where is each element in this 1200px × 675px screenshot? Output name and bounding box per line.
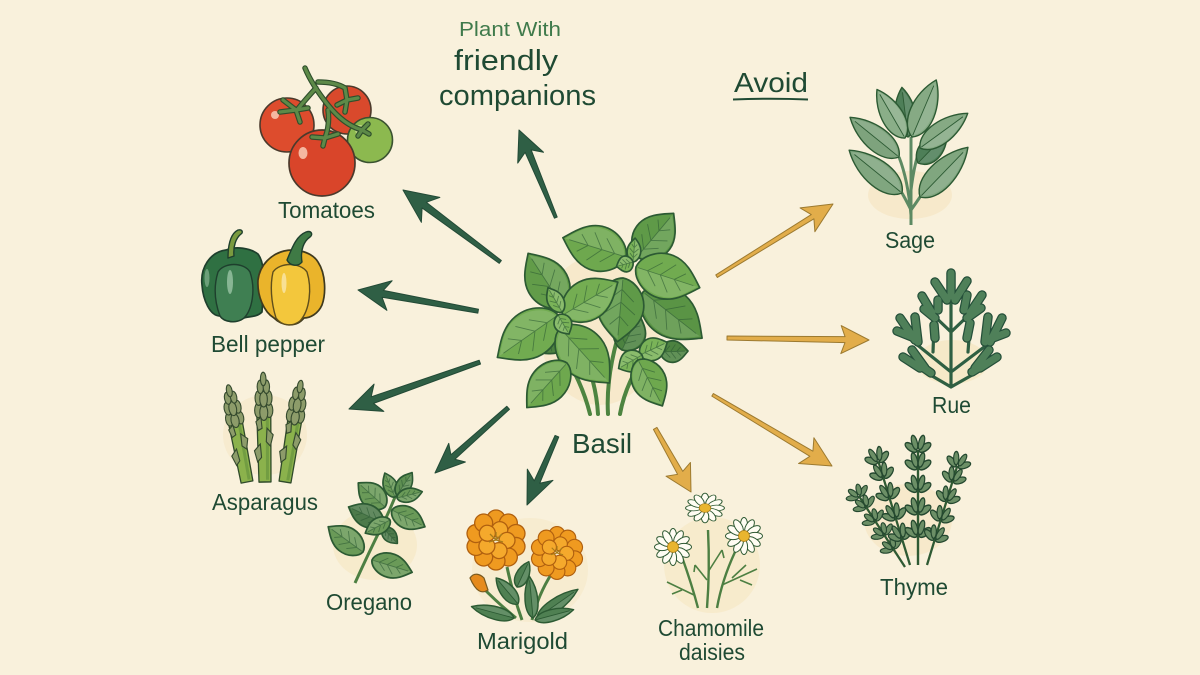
tomato vine (280, 68, 369, 146)
basil leaves (484, 200, 716, 420)
chamomile flower: top (686, 493, 724, 523)
plant: chamomile daisies (654, 493, 762, 613)
label: chamomile daisies: daisies (679, 639, 745, 665)
avoid arrows (643, 192, 869, 499)
arrow to tomatoes (394, 177, 510, 274)
plant: asparagus (218, 372, 310, 484)
arrow to oregano (426, 398, 516, 482)
arrow to thyme (705, 382, 840, 479)
title: plant with friendly companions: companions (439, 80, 596, 112)
marigold flower: right (529, 527, 585, 579)
tomato: front (289, 130, 355, 196)
arrow to sage (709, 192, 840, 288)
marigold flower: left (465, 510, 527, 570)
green pepper (202, 230, 263, 322)
arrow to chamomile (643, 422, 703, 499)
tomato: back (260, 86, 392, 162)
plant: rue (897, 273, 1006, 387)
chamomile stems (667, 530, 757, 608)
label: marigold: Marigold (477, 628, 568, 654)
label: basil: Basil (572, 428, 632, 459)
arrow to bell pepper (355, 275, 481, 326)
label: bell pepper: Bell pepper (211, 331, 325, 357)
label: chamomile daisies (658, 615, 764, 665)
title: plant with friendly companions (439, 19, 596, 112)
label: oregano: Oregano (326, 589, 412, 615)
label: thyme: Thyme (880, 574, 948, 600)
chamomile flower: left (654, 528, 692, 566)
label: tomatoes: Tomatoes (278, 197, 375, 223)
arrow to rue (727, 324, 869, 354)
heading: avoid: Avoid (734, 67, 808, 98)
yellow pepper (258, 232, 325, 325)
plant: thyme (841, 434, 974, 574)
plant: marigolds (465, 510, 588, 626)
label: asparagus: Asparagus (212, 489, 318, 515)
label: chamomile daisies: Chamomile (658, 615, 764, 641)
plant: sage (841, 75, 977, 225)
arrow to title (506, 125, 569, 223)
arrow to asparagus (344, 348, 485, 422)
arrow to marigold (514, 431, 570, 511)
chamomile flower: right (726, 518, 762, 554)
plant: tomatoes (260, 68, 392, 196)
label: rue: Rue (932, 392, 971, 418)
label: sage: Sage (885, 227, 935, 253)
plant: oregano (321, 469, 430, 584)
marigold stems and leaves (470, 559, 582, 626)
central plant: basil (484, 200, 716, 420)
title: plant with friendly companions: friendly (454, 45, 559, 77)
title: plant with friendly companions: Plant With (459, 19, 561, 41)
plant: bell peppers (202, 230, 325, 325)
companion arrows (344, 125, 570, 511)
basil stems (572, 340, 635, 414)
